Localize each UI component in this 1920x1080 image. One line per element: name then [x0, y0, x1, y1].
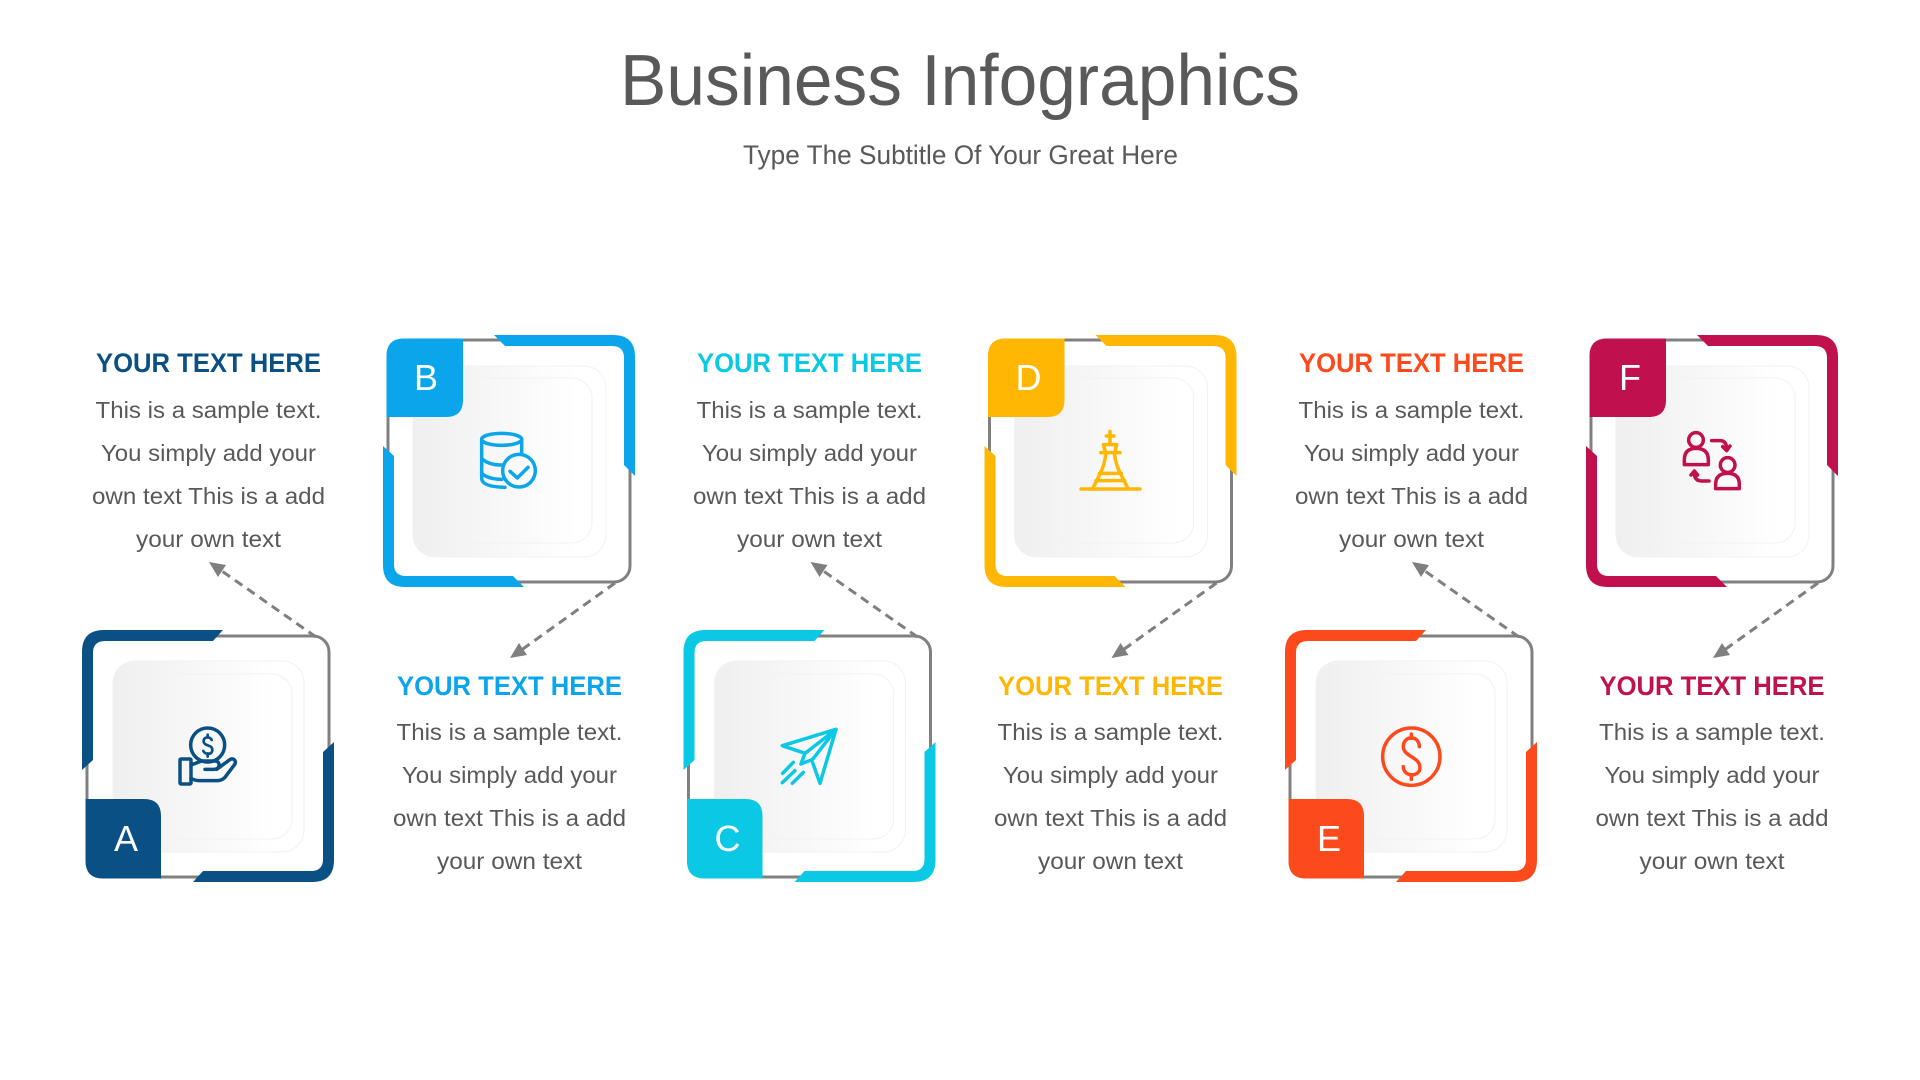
text: E body: own text This is a add	[1295, 483, 1528, 509]
text: D body: This is a sample text.	[998, 719, 1224, 745]
icon: database check	[482, 433, 535, 487]
badge letter F: F	[1619, 357, 1641, 398]
text: C body: This is a sample text.	[696, 397, 922, 423]
text: A body	[92, 397, 325, 552]
title: Business Infographics	[620, 41, 1300, 121]
text: C body: You simply add your	[702, 440, 917, 466]
text: B body: own text This is a add	[393, 805, 626, 831]
text: F body: own text This is a add	[1596, 805, 1828, 831]
text: B body: This is a sample text.	[396, 719, 622, 745]
badge letter A: A	[114, 818, 138, 859]
text: A body: your own text	[136, 526, 281, 552]
text: F body	[1596, 719, 1828, 874]
badge letter D: D	[1016, 357, 1042, 398]
panel: card F	[1586, 335, 1838, 587]
icon: hand holding coin	[180, 728, 235, 784]
text: E body	[1295, 397, 1528, 552]
text: D body	[994, 719, 1227, 874]
arrow: A to text	[209, 562, 316, 637]
text: F heading: YOUR TEXT HERE	[1600, 671, 1824, 701]
text: A heading: YOUR TEXT HERE	[96, 348, 321, 378]
text: C body	[693, 397, 926, 552]
text: A body: You simply add your	[101, 440, 316, 466]
text: B heading: YOUR TEXT HERE	[397, 671, 622, 701]
text: B body: your own text	[437, 848, 582, 874]
text: B body: You simply add your	[402, 762, 617, 788]
text: E body: This is a sample text.	[1298, 397, 1524, 423]
text: A body: This is a sample text.	[96, 397, 322, 423]
text: D body: You simply add your	[1003, 762, 1218, 788]
text: C heading: YOUR TEXT HERE	[697, 348, 922, 378]
badge letter C: C	[714, 818, 740, 859]
arrow: F to text	[1713, 583, 1818, 658]
icon: dollar coin	[1383, 728, 1440, 785]
text: E heading: YOUR TEXT HERE	[1299, 348, 1524, 378]
text: F body: You simply add your	[1604, 762, 1820, 788]
text: F body: This is a sample text.	[1599, 719, 1825, 745]
icon: people exchange	[1684, 433, 1739, 489]
panel: card E	[1285, 630, 1537, 882]
panel: card B	[383, 335, 635, 587]
panel: card A	[82, 630, 334, 882]
arrow: B to text	[510, 583, 615, 658]
text: F body: your own text	[1640, 848, 1785, 874]
panel: card D	[984, 335, 1236, 587]
arrow: D to text	[1112, 583, 1216, 658]
text: A body: own text This is a add	[92, 483, 325, 509]
icon: paper plane	[782, 729, 836, 783]
arrow: E to text	[1412, 562, 1519, 637]
text: D body: own text This is a add	[994, 805, 1227, 831]
text: D body: your own text	[1038, 848, 1183, 874]
text: D heading: YOUR TEXT HERE	[998, 671, 1223, 701]
icon: chess piece	[1081, 431, 1140, 489]
text: B body	[393, 719, 626, 874]
text: E body: You simply add your	[1304, 440, 1519, 466]
text: C body: your own text	[737, 526, 882, 552]
text: E body: your own text	[1339, 526, 1484, 552]
subtitle: Type The Subtitle Of Your Great Here	[743, 140, 1178, 170]
badge letter B: B	[414, 357, 438, 398]
badge letter E: E	[1317, 818, 1341, 859]
panel: card C	[684, 630, 936, 882]
text: C body: own text This is a add	[693, 483, 926, 509]
arrow: C to text	[810, 562, 918, 637]
